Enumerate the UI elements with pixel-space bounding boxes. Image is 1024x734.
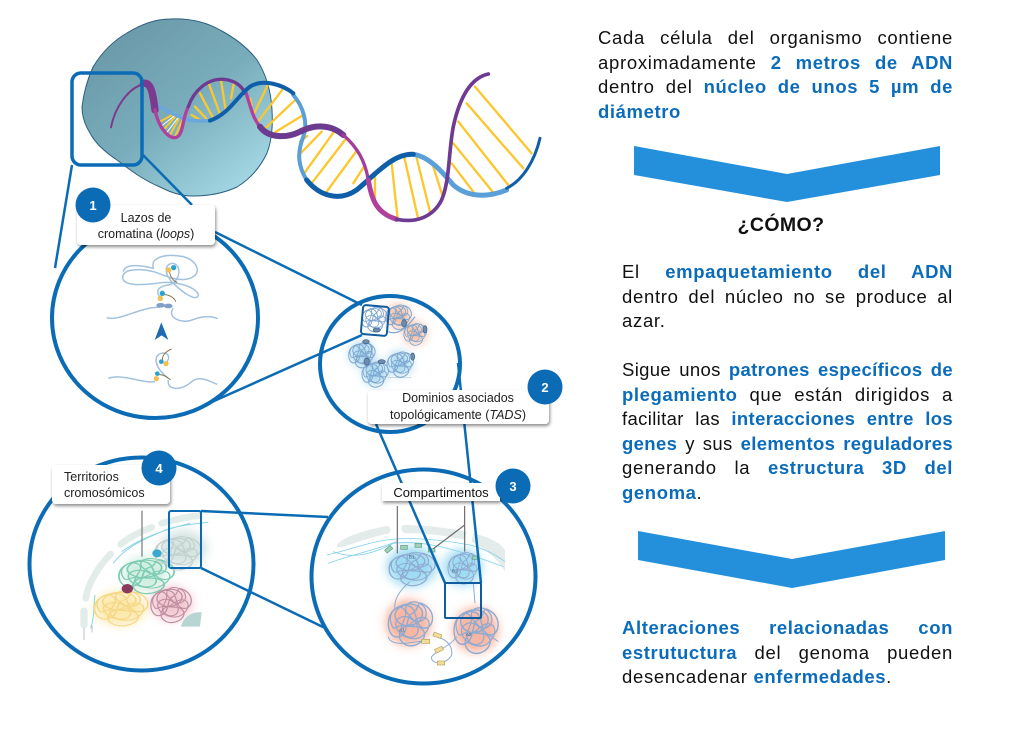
- text block: folding patterns: facilitar las interacciones entre los: [622, 408, 953, 429]
- heading: how: ¿CÓMO?: [738, 214, 824, 236]
- panel: circle 3 compartments: [312, 470, 536, 684]
- label 1 loops: Lazos de: [121, 211, 171, 225]
- nucleus selection square: [72, 73, 142, 165]
- text block: diseases: desencadenar enfermedades.: [622, 666, 892, 687]
- text block: folding patterns: genes y sus elementos reguladores: [622, 433, 953, 454]
- TAD domains illustration: [344, 299, 431, 392]
- label 3 compartments: [382, 468, 530, 504]
- label 4 territories: cromosómicos: [64, 486, 145, 500]
- panel: circle 4 chromosome territories: [30, 458, 254, 670]
- label 4 territories: Territorios: [64, 470, 119, 484]
- compartments illustration: B1: [409, 555, 415, 561]
- territories illustration: [84, 511, 210, 640]
- label 2 TADs: Dominios asociados: [402, 391, 514, 405]
- label 2 TADs: topológicamente (TADS): [390, 408, 526, 422]
- text block: folding patterns: [622, 359, 953, 503]
- label 1 loops: [76, 188, 215, 245]
- text block: folding patterns: genoma.: [622, 482, 702, 503]
- text block: diseases: Alteraciones relacionadas con: [622, 617, 953, 638]
- text block: packaging: El empaquetamiento del ADN: [622, 261, 953, 282]
- nucleus: [82, 19, 272, 196]
- text block: folding patterns: Sigue unos patrones específicos de: [622, 359, 953, 380]
- text block: diseases: estrutuctura del genoma pueden: [622, 642, 953, 663]
- text block: intro: Cada célula del organismo contiene: [598, 27, 953, 48]
- text block: packaging: azar.: [622, 310, 666, 331]
- label 2 TADs: 2: [541, 380, 549, 395]
- compartments illustration: A1: [399, 627, 405, 633]
- chromatin loops illustration: [107, 255, 218, 388]
- text block: diseases: [622, 617, 953, 687]
- panel: circle 1 loops: [52, 218, 258, 418]
- label 4 territories: 4: [155, 461, 163, 476]
- connector lines between zoom levels: [55, 155, 481, 628]
- label 1 loops: cromatina (loops): [98, 227, 194, 241]
- territory selection square: [169, 511, 201, 568]
- arrow: chevron 2: [638, 531, 945, 588]
- text block: folding patterns: plegamiento que están dirigidos a: [622, 384, 953, 405]
- text block: intro: aproximadamente 2 metros de ADN: [598, 52, 953, 73]
- text block: folding patterns: generando la estructura 3D del: [622, 457, 953, 478]
- TAD selection square: [361, 305, 389, 336]
- compartments illustration: A2: [466, 632, 472, 638]
- label 3 compartments: Compartimentos: [393, 485, 489, 500]
- label 4 territories: [52, 450, 176, 504]
- text block: intro: dentro del núcleo de unos 5 µm de: [598, 76, 953, 97]
- compartments illustration: [327, 506, 507, 665]
- arrow: chevron 1: [634, 146, 940, 202]
- text block: intro: [598, 27, 953, 122]
- compartments illustration: B2: [452, 568, 458, 574]
- panel: circle 2 TADs: [320, 296, 460, 432]
- DNA double helix: [111, 74, 540, 220]
- text block: intro: diámetro: [598, 101, 681, 122]
- label 2 TADs: [368, 370, 562, 424]
- label 1 loops: 1: [89, 198, 97, 213]
- label 3 compartments: 3: [509, 479, 517, 494]
- text block: packaging: dentro del núcleo no se produce al: [622, 286, 953, 307]
- text block: packaging: [622, 261, 953, 331]
- compartment selection square: [445, 583, 481, 618]
